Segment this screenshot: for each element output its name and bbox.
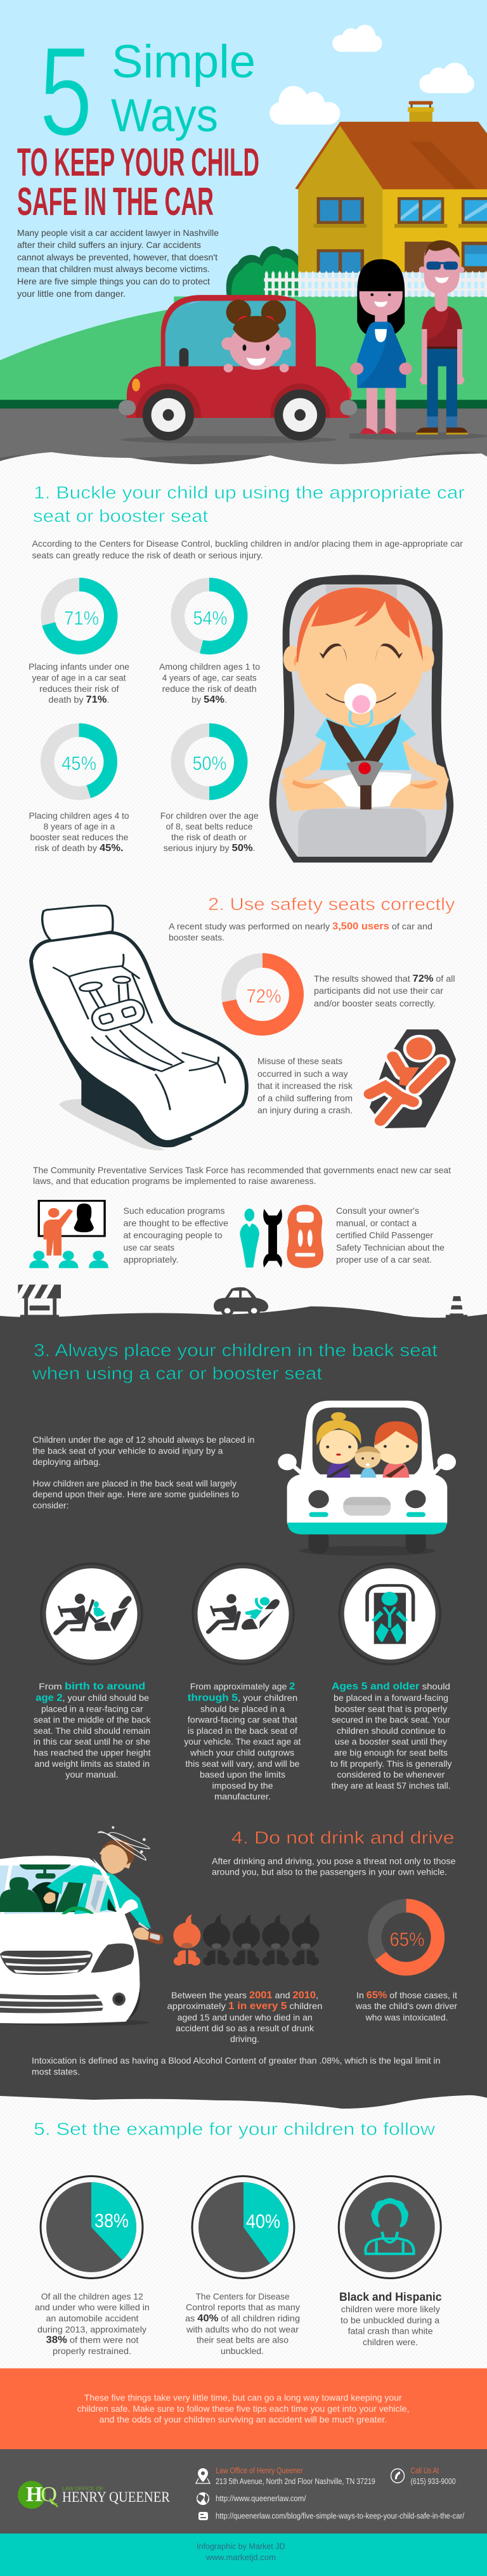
- text: Black and Hispanic: children were more likely: [341, 2304, 440, 2314]
- panel: credits: www.marketjd.com: [205, 2553, 276, 2562]
- text: 65% of cases: who was intoxicated.: [365, 2012, 448, 2022]
- text: ages 5 and older: to fit properly. This is generally: [330, 1759, 451, 1769]
- caption: 45%: [29, 810, 129, 854]
- dark section background: [0, 1306, 487, 2109]
- donut: 65%: [375, 1906, 438, 1969]
- donut: 54%: 54%: [193, 607, 227, 629]
- icon: technician, wrench, seat: [240, 1205, 323, 1268]
- panel: conclusion: children safe. Make sure to follow these five tips each time you get into your vehicle,: [77, 2404, 410, 2414]
- mom: [350, 259, 412, 434]
- dad: [416, 240, 468, 434]
- text: 38%: 38% of them were not: [46, 2335, 139, 2345]
- contact details: http://www.queenerlaw.com/: [216, 2494, 306, 2503]
- text: ages 5 and older: be placed in a forward-facing: [334, 1693, 448, 1703]
- text: ages 5 and older: Ages 5 and older should: [332, 1681, 450, 1692]
- headlight and grille: [91, 1944, 134, 1973]
- text: ages 5 and older: [330, 1681, 451, 1791]
- icon: road car: [214, 1287, 268, 1317]
- text: education programs: Such education programs: [123, 1206, 224, 1216]
- heading: section 5: 5. Set the example for your children to follow: [34, 2119, 436, 2139]
- dizzy halo: [98, 1831, 150, 1860]
- text: intoxication definition: [32, 2055, 440, 2077]
- section 4 intro: around you, but also to the passengers in your own vehicle.: [212, 1867, 447, 1877]
- title: Simple: [112, 36, 256, 88]
- heading: section 3: when using a car or booster seat: [32, 1363, 322, 1383]
- background: sky: [0, 0, 487, 457]
- text: birth to age 2: seat. The child should remain: [34, 1726, 150, 1736]
- text: misuse: of a child suffering from: [257, 1093, 353, 1103]
- intro text: cannot always be prevented, however, that doesn't: [17, 252, 218, 263]
- text: 65% of cases: was the child's own driver: [355, 2001, 457, 2011]
- text: consult manual: Safety Technician about the: [336, 1242, 445, 1252]
- section 4 intro: After drinking and driving, you pose a threat not only to those: [212, 1856, 456, 1866]
- panel: credits: Infographic by Market JD: [197, 2542, 285, 2551]
- text: 1 in 5: driving.: [230, 2034, 259, 2044]
- text: education programs: [123, 1206, 228, 1265]
- straps: [326, 714, 401, 769]
- section 1 intro: seats can greatly reduce the risk of death or serious injury.: [32, 550, 263, 561]
- text: task force: [33, 1165, 451, 1186]
- intro text: mean that children must always become victims.: [17, 264, 210, 274]
- pacifier: [326, 693, 396, 703]
- text: consult manual: certified Child Passenger: [336, 1230, 433, 1240]
- icon: road barrier: [15, 1285, 61, 1318]
- hill: [0, 296, 487, 400]
- text: ages 5 and older: children should continue to: [337, 1726, 446, 1736]
- donut: 50%: 50%: [193, 752, 227, 774]
- contact details: 213 5th Avenue, North 2nd Floor Nashville, TN 37219: [216, 2477, 375, 2486]
- heading: section 1: seat or booster seat: [33, 506, 208, 526]
- pie: 38%: 38%: [94, 2209, 129, 2232]
- text: task force: The Community Preventative Services Task Force has recommended that governments enact new car seat: [33, 1165, 451, 1175]
- donut: 71%: 71%: [64, 607, 99, 629]
- caption: 71%: year of age in a car seat: [32, 672, 126, 682]
- caption: 50%: For children over the age: [160, 810, 259, 821]
- icon: rear-facing seat: [41, 1564, 142, 1664]
- text: 40%: their seat belts are also: [197, 2335, 289, 2345]
- icon: map pin: [196, 2468, 210, 2483]
- text: misuse: occurred in such a way: [257, 1069, 348, 1079]
- icon: traffic cone: [446, 1296, 467, 1318]
- illustration: drunk driver in car: [0, 1826, 163, 2026]
- intro text: your little one from danger.: [17, 289, 126, 299]
- heading: section 1: 1. Buckle your child up using the appropriate car: [34, 483, 465, 502]
- illustration: large car seat: [31, 906, 247, 1150]
- illustration: family in car: [278, 1401, 456, 1556]
- caption: 54%: reduce the risk of death: [162, 684, 257, 694]
- text: 1 in 5: accident did so as a result of drunk: [176, 2023, 315, 2033]
- text: 40%: The Centers for Disease: [196, 2291, 290, 2301]
- contact details: http://queenerlaw.com/blog/five-simple-ways-to-keep-your-child-safe-in-the-car/: [216, 2512, 465, 2521]
- car: red: [119, 295, 357, 448]
- contact details: [216, 2466, 465, 2521]
- text: age 2 through 5: manufacturer.: [214, 1791, 271, 1801]
- donut: 50%: [178, 730, 241, 793]
- text: birth to age 2: From birth to around: [39, 1681, 145, 1692]
- donut: 54%: [178, 585, 241, 647]
- text: consult manual: proper use of a car seat.: [336, 1254, 432, 1265]
- pie: 40%: [192, 2176, 294, 2278]
- guideline icons: [41, 1564, 440, 1664]
- donut: 65%: 65%: [389, 1929, 425, 1951]
- text: education programs: at encouraging people to: [123, 1230, 223, 1240]
- text: intoxication definition: Intoxication is defined as having a Blood Alcohol Content of greater than .08%, which is the legal limit in: [32, 2055, 440, 2065]
- icon: globe: [197, 2492, 209, 2505]
- text: birth to age 2: seat in the middle of the back: [34, 1715, 152, 1725]
- hair: [297, 587, 423, 663]
- text: 1 in 5: aged 15 and under who died in an: [178, 2012, 313, 2022]
- icon: phone: [391, 2469, 405, 2483]
- shadow: [121, 436, 337, 443]
- text: consult manual: Consult your owner's: [336, 1206, 419, 1216]
- text: birth to age 2: in this car seat until he or she: [34, 1736, 150, 1747]
- text: education programs: use car seats: [123, 1242, 174, 1252]
- caption: 54%: Among children ages 1 to: [159, 661, 260, 672]
- arms: [283, 739, 449, 784]
- pie: 38%: [41, 2176, 143, 2278]
- text: Black and Hispanic: children were.: [363, 2337, 418, 2347]
- text: 38%: properly restrained.: [53, 2346, 131, 2356]
- section 3 intro: consider:: [33, 1500, 68, 1511]
- logo: Q: [41, 2483, 57, 2506]
- text: task force: laws, and that education programs be implemented to raise awareness.: [33, 1176, 316, 1186]
- text: misuse: Misuse of these seats: [257, 1056, 342, 1066]
- icon: child bust: [339, 2176, 441, 2278]
- text: age 2 through 5: your vehicle. The exact age at: [184, 1736, 301, 1747]
- text: 38%: an automobile accident: [46, 2313, 139, 2324]
- caption: 45%: 8 years of age in a: [44, 821, 115, 831]
- heading: section 4: 4. Do not drink and drive: [231, 1828, 455, 1847]
- text: ages 5 and older: secured in the back seat. Your: [332, 1715, 450, 1725]
- section 3 intro: deploying airbag.: [33, 1457, 101, 1467]
- icon: blog: [198, 2512, 208, 2520]
- text: ages 5 and older: use a booster seat until they: [335, 1736, 447, 1747]
- icon: child in seat in crash: [370, 1029, 456, 1128]
- text: birth to age 2: age 2, your child should be: [36, 1693, 149, 1703]
- caption: 50%: serious injury by 50%.: [164, 843, 256, 854]
- text: age 2 through 5: [184, 1681, 301, 1801]
- text: 65% of cases: In 65% of those cases, it: [356, 1990, 457, 2001]
- dad passenger: [374, 1421, 418, 1478]
- text: 40%: with adults who do not wear: [186, 2324, 299, 2334]
- logo: LAW OFFICE OF: [62, 2486, 103, 2492]
- text: birth to age 2: your manual.: [65, 1769, 119, 1779]
- house: [295, 101, 487, 273]
- icon: forward-facing seat: [193, 1564, 294, 1664]
- caption: 54%: by 54%.: [192, 694, 227, 705]
- text: 40%: Control reports that as many: [186, 2302, 300, 2312]
- section 4 intro: [212, 1856, 456, 1877]
- panel: conclusion: and the odds of your children surviving an accident will be much greater.: [100, 2414, 387, 2424]
- caption: 71%: Placing infants under one: [29, 661, 129, 672]
- panel: credits: [0, 2534, 487, 2576]
- caption: 71%: death by 71%.: [48, 694, 109, 705]
- text: age 2 through 5: should be placed in a: [200, 1704, 285, 1714]
- cloud: [419, 63, 474, 93]
- donut: 71%: [48, 585, 111, 647]
- baby passenger: [354, 1447, 380, 1478]
- title: Ways: [111, 90, 218, 141]
- legs: [281, 778, 449, 811]
- text: 38%: and under who were killed in: [35, 2302, 150, 2312]
- panel: conclusion: [0, 2368, 487, 2449]
- illustration: baby in car seat: [269, 575, 453, 862]
- heading: section 2: 2. Use safety seats correctly: [208, 894, 455, 914]
- text: 38%: Of all the children ages 12: [41, 2291, 143, 2301]
- text: misuse: that it increased the risk: [257, 1081, 353, 1091]
- text: age 2 through 5: imposed by the: [212, 1781, 273, 1791]
- text: ages 5 and older: are big enough for seat belts: [334, 1748, 448, 1758]
- caption: 54%: 4 years of age, car seats: [162, 672, 257, 682]
- text: Black and Hispanic: Black and Hispanic: [339, 2291, 442, 2303]
- section 2 intro: [169, 921, 432, 942]
- text: consult manual: [336, 1206, 445, 1265]
- donut: 72%: 72%: [246, 985, 282, 1007]
- text: age 2 through 5: based upon the limits: [200, 1769, 285, 1779]
- section 1 intro: [32, 538, 463, 561]
- caption: 50%: [160, 810, 259, 854]
- text: results: The results showed that 72% of all: [314, 973, 455, 984]
- contact details: Law Office of Henry Queener: [216, 2466, 303, 2475]
- text: age 2 through 5: through 5 , your children: [188, 1693, 297, 1703]
- text: 1 in 5: Between the years 2001 and 2010,: [171, 1990, 318, 2001]
- caption: 50%: the risk of death or: [171, 832, 247, 842]
- text: birth to age 2: has reached the upper height: [34, 1748, 151, 1758]
- contact details: (615) 933-9000: [411, 2477, 456, 2486]
- text: education programs: appropriately.: [123, 1254, 179, 1265]
- text: 40%: [185, 2291, 300, 2356]
- pie: 40%: 40%: [246, 2210, 280, 2232]
- caption: 71%: reduces their risk of: [39, 684, 119, 694]
- donut: 45%: [48, 730, 110, 793]
- text: results: and/or booster seats correctly.: [314, 998, 436, 1008]
- hero illustration: [0, 25, 487, 448]
- text: ages 5 and older: considered to be whenever: [337, 1769, 445, 1779]
- logo: [18, 2481, 171, 2509]
- title: 5: [39, 21, 93, 162]
- contact details: Call Us At: [411, 2466, 439, 2475]
- text: ages 5 and older: booster seat that is properly: [335, 1704, 447, 1714]
- text: 40%: as 40% of all children riding: [185, 2313, 300, 2324]
- eyes: [320, 644, 347, 661]
- intro text: [17, 228, 219, 299]
- text: age 2 through 5: forward-facing car seat that: [188, 1715, 297, 1725]
- face: [297, 587, 424, 727]
- icon: presentation: [29, 1200, 108, 1268]
- caption: 45%: Placing children ages 4 to: [29, 810, 129, 821]
- mom passenger: [316, 1412, 361, 1478]
- text: 38%: [35, 2291, 150, 2356]
- section 3 intro: How children are placed in the back seat will largely: [33, 1478, 237, 1488]
- panel: conclusion: These five things take very little time, but can go a long way toward keeping your: [84, 2392, 402, 2402]
- text: age 2 through 5: is placed in the back seat of: [188, 1726, 297, 1736]
- text: birth to age 2: and weight limits as stated in: [34, 1759, 150, 1769]
- text: age 2 through 5: From approximately age 2: [190, 1681, 295, 1692]
- text: ages 5 and older: they are at least 57 inches tall.: [332, 1781, 451, 1791]
- bush: [226, 246, 300, 296]
- caption: 45%: risk of death by 45%.: [35, 843, 124, 854]
- icon: booster seat: [339, 1564, 440, 1664]
- background: light striped sections: [0, 452, 487, 1322]
- title: SAFE IN THE CAR: [17, 180, 214, 224]
- text: Black and Hispanic: [339, 2291, 442, 2347]
- diaper: [323, 772, 412, 807]
- text: intoxication definition: most states.: [32, 2067, 80, 2077]
- bottle: [144, 1932, 163, 1944]
- title: [17, 21, 259, 224]
- caption: 71%: [29, 661, 129, 705]
- intro text: after their child suffers an injury. Car accidents: [17, 240, 201, 250]
- donut: 45%: 45%: [62, 752, 96, 774]
- cloud: [269, 86, 340, 125]
- text: birth to age 2: placed in a rear-facing car: [41, 1704, 143, 1714]
- text: birth to age 2: [34, 1681, 152, 1779]
- caption: 54%: [159, 661, 260, 705]
- text: 40%: unbuckled.: [221, 2346, 264, 2356]
- chimney: [408, 101, 434, 142]
- girl: [221, 300, 291, 370]
- panel: footer contact: [0, 2449, 487, 2534]
- caption: 45%: booster seat reduces the: [30, 832, 129, 842]
- driver jacket: [46, 1865, 151, 1929]
- fence: [264, 271, 487, 297]
- section 1 intro: According to the Centers for Disease Control, buckling children in and/or placing them in age-appropriate car: [32, 538, 463, 549]
- text: misuse: [257, 1056, 353, 1115]
- car lower: [0, 1982, 149, 2026]
- section 2 intro: A recent study was performed on nearly 3,500 users of car and: [169, 921, 432, 932]
- logo: HENRY QUEENER: [62, 2489, 171, 2505]
- title: TO KEEP YOUR CHILD: [17, 141, 259, 185]
- cloud: [332, 25, 382, 52]
- section 3 intro: Children under the age of 12 should always be placed in: [33, 1434, 255, 1445]
- section 3 intro: the back seat of your vehicle to avoid injury by a: [33, 1445, 223, 1455]
- text: age 2 through 5: which your child outgrows: [190, 1748, 294, 1758]
- text: Black and Hispanic: to be unbuckled during a: [341, 2315, 439, 2326]
- heading: section 3: [32, 1340, 438, 1383]
- ears: [283, 646, 301, 672]
- text: education programs: are thought to be effective: [123, 1218, 228, 1228]
- section 3 intro: depend upon their age. Here are some guidelines to: [33, 1489, 239, 1499]
- intro text: Here are five simple things you can do to protect: [17, 276, 210, 287]
- text: misuse: an injury during a crash.: [257, 1105, 353, 1115]
- heading: section 1: [33, 483, 465, 526]
- logo: H: [26, 2483, 42, 2506]
- pictogram: 1 in 5 children: [173, 1915, 320, 1965]
- caption: 50%: of 8, seat belts reduce: [166, 821, 253, 831]
- grass strip: [0, 400, 487, 408]
- text: Black and Hispanic: fatal crash than white: [348, 2326, 433, 2336]
- text: 65% of cases: [355, 1990, 457, 2022]
- section 3 intro: [33, 1434, 255, 1511]
- intro text: Many people visit a car accident lawyer in Nashville: [17, 228, 219, 238]
- text: consult manual: manual, or contact a: [336, 1218, 417, 1228]
- donut: 72%: [228, 960, 297, 1029]
- road: [0, 408, 487, 464]
- text: age 2 through 5: this seat will vary, and will be: [185, 1759, 300, 1769]
- shirt: [315, 718, 416, 770]
- text: 1 in 5: approximately 1 in every 5 children: [167, 2001, 323, 2012]
- section 2 intro: booster seats.: [169, 932, 224, 942]
- heading: section 3: 3. Always place your children in the back seat: [34, 1340, 438, 1360]
- text: results: [314, 973, 455, 1008]
- driver head: [100, 1840, 134, 1874]
- text: 38%: during 2013, approximately: [37, 2324, 146, 2334]
- text: results: participants did not use their car: [314, 986, 443, 996]
- text: 1 in 5: [167, 1990, 323, 2044]
